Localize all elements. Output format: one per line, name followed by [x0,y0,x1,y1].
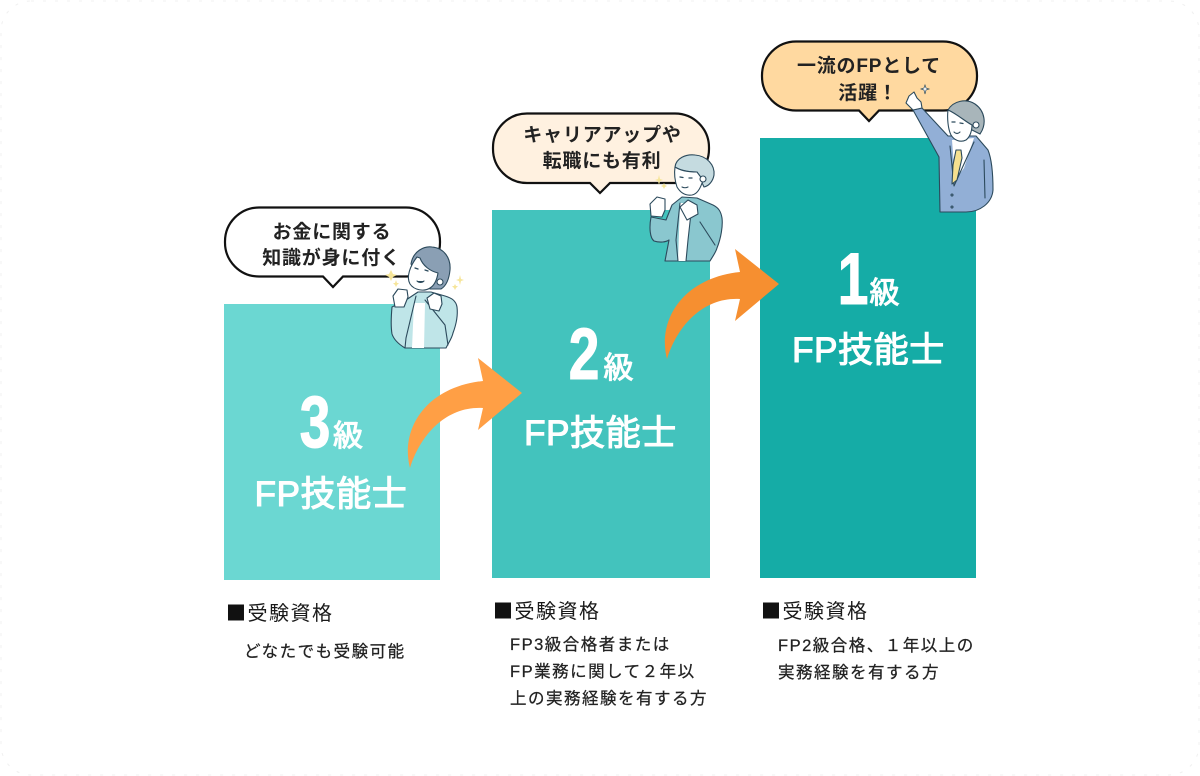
grade 3 name: FP技能士 [255,475,407,514]
panel: grade 1 bar [760,138,976,578]
hair [948,101,984,134]
text block: grade 1 requirements: ■受験資格 [761,595,868,624]
speech bubble: grade 1: 活躍！ [838,82,898,104]
hair [411,247,450,289]
icon: woman cheering [385,247,464,348]
icon: man pointing up, grade 1 [906,85,993,212]
speech bubble: grade 2: キャリアアップや [523,124,682,146]
sparkle [921,85,929,94]
text block: grade 1 requirements [761,595,975,682]
arrow: grade 2 to grade 1 [665,249,779,359]
text block: grade 2 requirements: 上の実務経験を有する方 [510,689,708,708]
sparkles [385,270,464,290]
jacket [650,197,722,261]
sparkles [655,175,667,189]
text block: grade 2 requirements: FP業務に関して２年以 [510,662,696,681]
fists [393,289,408,307]
grade 2 suffix: 級 [604,352,634,385]
grade 1 number: 1 [838,238,868,320]
text block: grade 2 requirements: FP3級合格者または [510,635,671,654]
hair [675,155,714,187]
panel: grade 3 bar [224,304,440,580]
speech bubble: grade 2: 転職にも有利 [543,150,661,172]
speech bubble: grade 2 [493,114,709,193]
grade 1 name: FP技能士 [792,331,945,370]
text block: grade 2 requirements [493,595,708,708]
speech bubble: grade 1: 一流のFPとして [797,55,941,77]
suit and raised arm [913,108,993,212]
grade 3 number: 3 [300,381,330,463]
icon: man with raised fist, grade 2 [650,155,722,261]
speech bubble: grade 1 [762,42,977,121]
text block: grade 2 requirements: ■受験資格 [493,595,600,624]
jacket [391,292,457,348]
grade 2 number: 2 [569,313,599,395]
arrow: grade 3 to grade 2 [408,358,522,468]
tie [952,150,962,184]
fist [906,92,922,110]
grade 3 suffix: 級 [333,420,363,453]
speech bubble: grade 3 [225,208,440,287]
speech bubble: grade 3: お金に関する [273,221,391,243]
text block: grade 1 requirements: 実務経験を有する方 [778,663,940,682]
face [408,257,438,290]
face [948,110,972,141]
text block: grade 3 requirements: ■受験資格 [226,597,334,626]
face [675,167,703,195]
speech bubble: grade 3: 知識が身に付く [262,246,401,269]
panel: grade 2 bar [492,210,710,578]
fists [650,197,665,217]
text block: grade 1 requirements: FP2級合格、１年以上の [778,636,975,655]
grade 2 name: FP技能士 [524,414,677,453]
text block: grade 3 requirements: どなたでも受験可能 [244,642,406,661]
text block: grade 3 requirements [226,597,406,661]
grade 1 suffix: 級 [870,277,900,310]
buttons [951,194,953,196]
